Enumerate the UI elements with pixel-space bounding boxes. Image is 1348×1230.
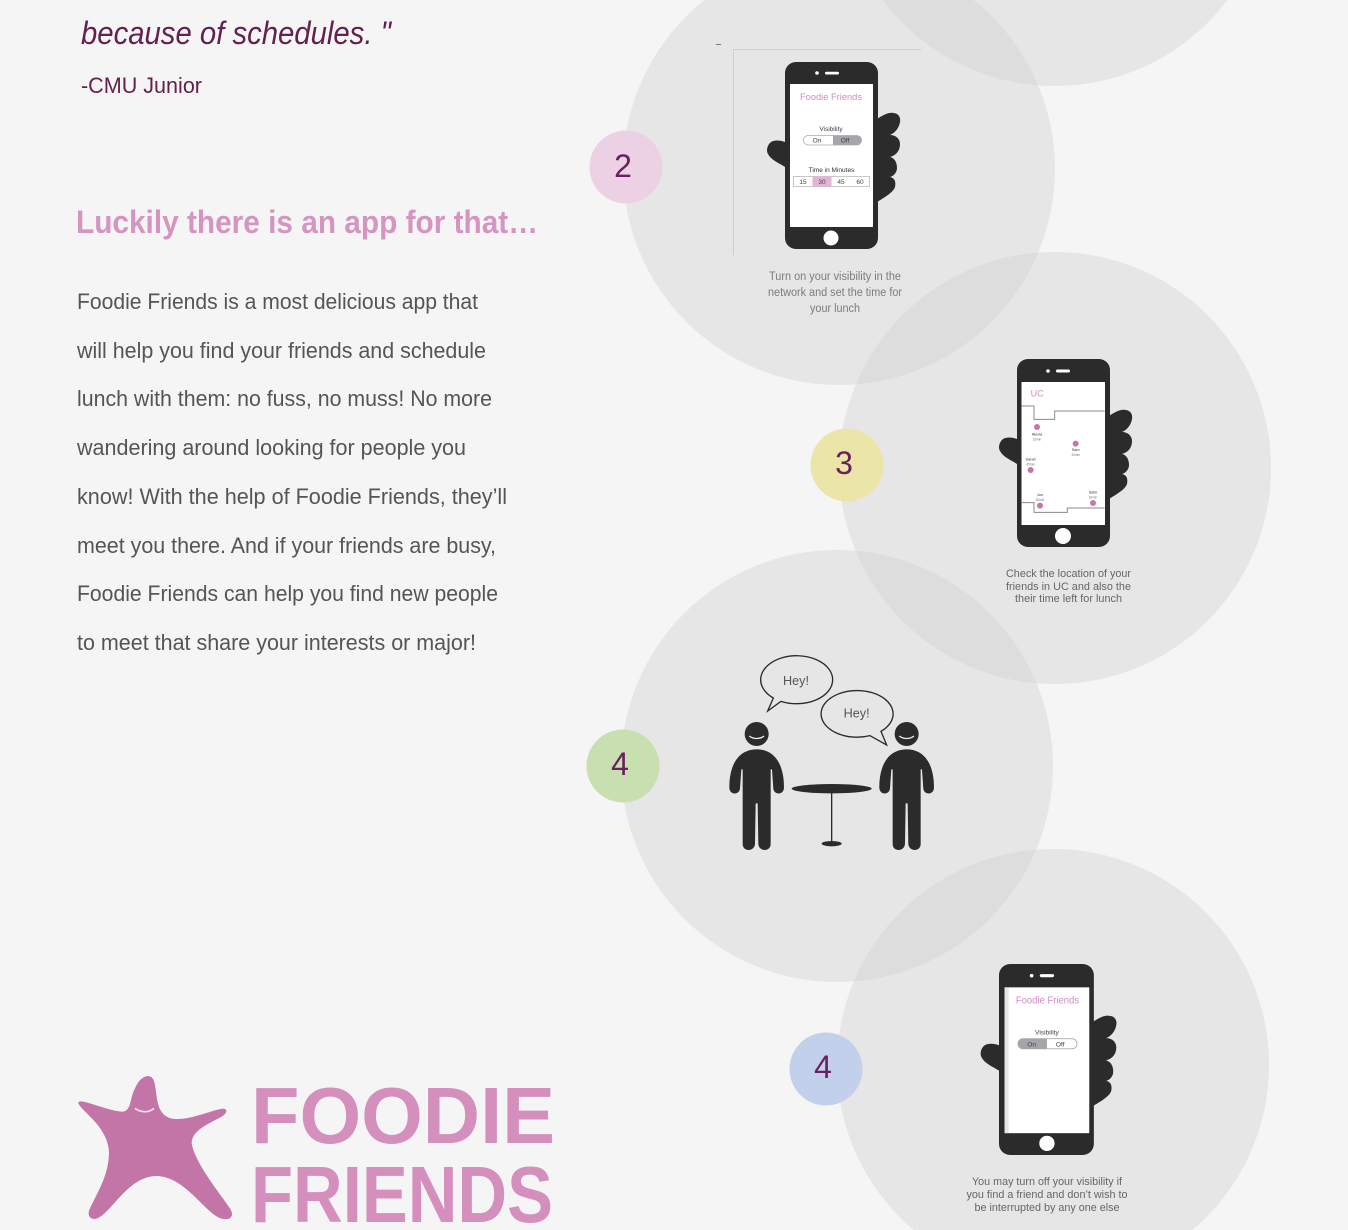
- phone: visibility and time settings: Time in Minutes: [809, 167, 855, 174]
- map floor plan, pins and names: Alexia: [1032, 433, 1043, 437]
- map floor plan, pins and names: Selin: [1089, 490, 1097, 494]
- map floor plan, pins and names: 30min: [1089, 495, 1098, 499]
- step badge 3: [810, 428, 884, 502]
- phone: visibility and time settings: 30: [818, 179, 826, 186]
- phone: visibility toggled on: Visibility: [1035, 1030, 1060, 1037]
- logo wordmark: FOODIE: [251, 1071, 555, 1160]
- phone: visibility toggled on: On: [1027, 1041, 1036, 1048]
- map floor plan, pins and names: 15min: [1033, 437, 1042, 441]
- logo wordmark: [251, 1071, 555, 1230]
- caption: step 4: [966, 1176, 1128, 1214]
- phone: visibility and time settings: Foodie Friends: [800, 92, 862, 103]
- caption: step 2: network and set the time for: [768, 287, 902, 299]
- speech bubble right: Hey!: [844, 707, 870, 721]
- map floor plan, pins and names: Sam: [1072, 448, 1080, 452]
- logo: Foodie Friends: [78, 1071, 555, 1230]
- caption: step 2: your lunch: [810, 303, 860, 315]
- caption: step 4: you find a friend and don’t wish to: [966, 1189, 1128, 1201]
- phone: visibility and time settings: 60: [856, 179, 864, 186]
- phone: visibility and time settings: 45: [837, 179, 845, 186]
- caption: step 4: be interrupted by any one else: [974, 1202, 1120, 1214]
- speech bubble left: [761, 656, 833, 711]
- table: [792, 784, 872, 846]
- map floor plan, pins and names: Sarah: [1026, 458, 1036, 462]
- caption: step 3: Check the location of your: [1006, 568, 1131, 580]
- frame lines around first phone: [716, 44, 921, 255]
- phone: visibility and time settings: On: [813, 138, 822, 144]
- quote text: because of schedules. ": [81, 15, 393, 51]
- phone: visibility and time settings: Visibility: [819, 126, 843, 133]
- caption: step 3: friends in UC and also the: [1006, 581, 1131, 593]
- phone: map of friends in UC: [999, 359, 1132, 547]
- map floor plan, pins and names: [1021, 388, 1105, 512]
- caption: step 2: Turn on your visibility in the: [769, 271, 901, 283]
- phone: visibility toggled on: [981, 964, 1116, 1155]
- phone: visibility and time settings: 15: [799, 179, 807, 186]
- step badge 2: 2: [614, 148, 632, 184]
- caption: step 2: [768, 271, 902, 315]
- body paragraph: meet you there. And if your friends are busy,: [77, 533, 496, 558]
- body paragraph: will help you find your friends and schedule: [76, 338, 486, 363]
- map floor plan, pins and names: 45min: [1026, 462, 1035, 466]
- caption: step 3: their time left for lunch: [1015, 593, 1122, 605]
- step badge 4: 4: [611, 746, 629, 782]
- body paragraph: [76, 289, 507, 655]
- step badge 4: [586, 730, 660, 802]
- map floor plan, pins and names: 30min: [1036, 498, 1045, 502]
- caption: step 4: You may turn off your visibility if: [972, 1176, 1123, 1188]
- phone: visibility toggled on: Foodie Friends: [1016, 996, 1079, 1007]
- speech bubble left: Hey!: [783, 674, 809, 688]
- person right: [879, 722, 934, 850]
- illustration: two friends meeting at a table: [729, 656, 934, 850]
- step badge 2: [590, 130, 662, 204]
- step badge 4 second: 4: [814, 1049, 832, 1085]
- body paragraph: Foodie Friends can help you find new people: [77, 581, 498, 606]
- step badge 4 second: [790, 1032, 862, 1106]
- body paragraph: to meet that share your interests or major!: [77, 630, 476, 655]
- step badge 3: 3: [835, 445, 853, 481]
- phone: visibility and time settings: Off: [841, 138, 849, 144]
- quote attribution: -CMU Junior: [81, 73, 202, 98]
- body paragraph: know! With the help of Foodie Friends, they’ll: [77, 484, 507, 509]
- map floor plan, pins and names: UC: [1031, 388, 1044, 398]
- body paragraph: lunch with them: no fuss, no muss! No more: [77, 386, 492, 411]
- heading: Luckily there is an app for that…: [76, 204, 538, 240]
- map floor plan, pins and names: 30min: [1071, 453, 1080, 457]
- caption: step 3: [1006, 568, 1131, 605]
- phone: visibility and time settings: [767, 62, 900, 249]
- map floor plan, pins and names: Jon: [1037, 493, 1043, 497]
- person left: [729, 722, 784, 850]
- icon: pink star mascot: [78, 1076, 232, 1219]
- phone: visibility toggled on: Off: [1056, 1041, 1065, 1048]
- body paragraph: Foodie Friends is a most delicious app that: [77, 289, 478, 314]
- body paragraph: wandering around looking for people you: [76, 435, 466, 460]
- speech bubble right: [821, 691, 893, 745]
